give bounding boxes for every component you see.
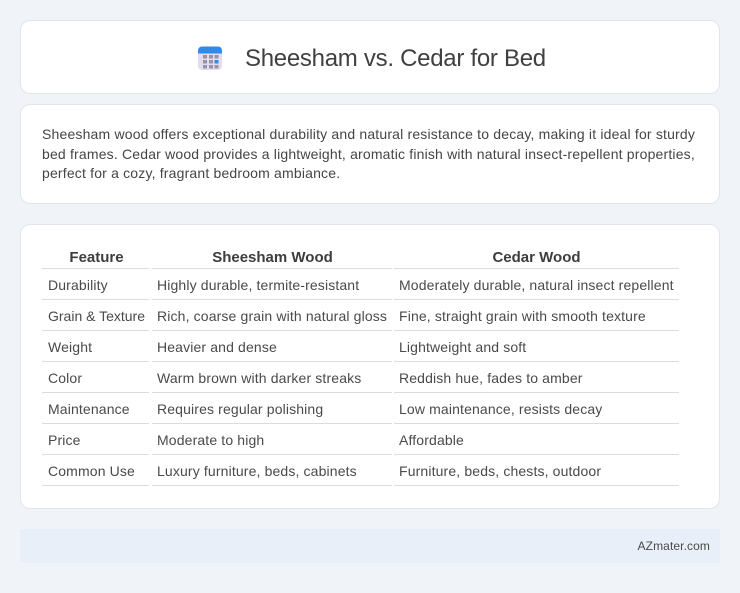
row: grain and texture: Rich, coarse grain with natural gloss [157,308,387,324]
row: maintenance: Low maintenance, resists decay [399,401,602,417]
row: color: Reddish hue, fades to amber [399,370,583,386]
icon: calendar [198,46,222,70]
row: grain and texture [48,308,646,324]
row: maintenance [48,401,602,417]
row: grain and texture: Fine, straight grain with smooth texture [399,308,646,324]
intro text [42,126,695,181]
row: durability: Moderately durable, natural insect repellent [399,277,674,293]
row: common use: Furniture, beds, chests, outdoor [399,463,601,479]
row: weight: Weight [48,339,92,355]
comparison table panel [20,224,720,509]
row: price: Price [48,432,81,448]
row: durability [48,277,674,293]
header row [69,249,581,266]
row: common use: Luxury furniture, beds, cabinets [157,463,357,479]
intro text: bed frames. Cedar wood provides a lightweight, aromatic finish with natural insect-repellent properties, [42,146,695,162]
row: durability: Durability [48,277,108,293]
header row: Cedar Wood [492,249,581,266]
row: maintenance: Maintenance [48,401,130,417]
row: color: Color [48,370,82,386]
row: color: Warm brown with darker streaks [157,370,361,386]
header row: Feature [69,249,124,266]
header row: Sheesham Wood [212,249,333,266]
intro text: Sheesham wood offers exceptional durability and natural resistance to decay, making it ideal for sturdy [42,126,695,142]
row: durability: Highly durable, termite-resistant [157,277,359,293]
row: price: Moderate to high [157,432,264,448]
title: Sheesham vs. Cedar for Bed [245,45,546,72]
footer credit: AZmater.com [638,539,710,553]
title card [20,20,720,94]
row: price: Affordable [399,432,464,448]
row: price [48,432,464,448]
table [42,249,679,486]
intro text: perfect for a cozy, fragrant bedroom ambiance. [42,165,340,181]
row: color [48,370,583,386]
intro panel [20,104,720,204]
row: weight [48,339,526,355]
row: grain and texture: Grain & Texture [48,308,145,324]
row: maintenance: Requires regular polishing [157,401,323,417]
row: weight: Lightweight and soft [399,339,526,355]
footer bar [20,529,720,563]
row: weight: Heavier and dense [157,339,277,355]
row: common use: Common Use [48,463,135,479]
row: common use [48,463,601,479]
